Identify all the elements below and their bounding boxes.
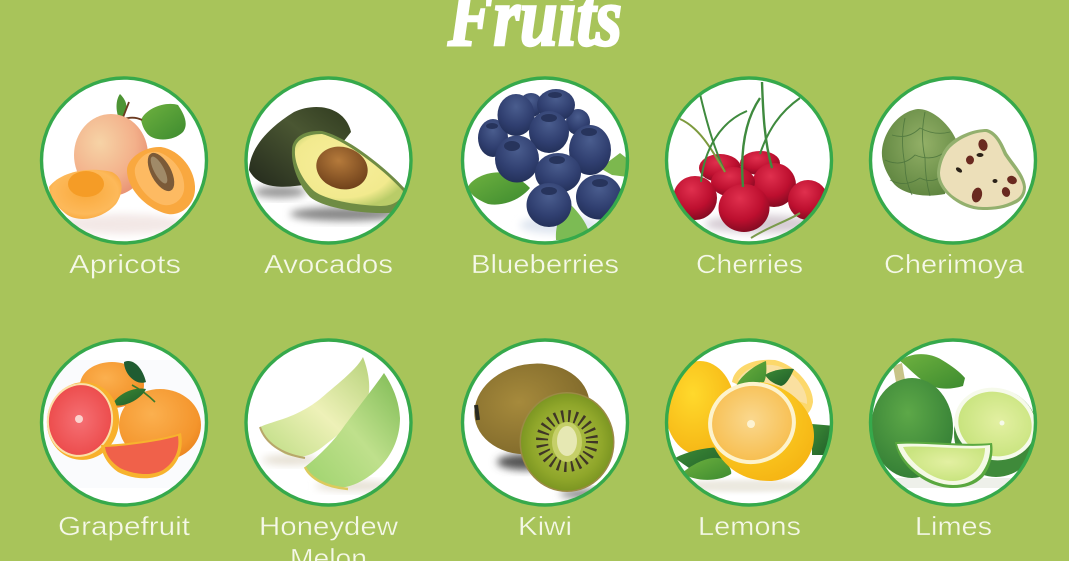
label: Cherimoya: Cherimoya — [884, 249, 1025, 279]
panel: avocados — [246, 78, 411, 279]
ring — [462, 340, 628, 505]
panel: lemons — [665, 340, 835, 541]
ring — [42, 340, 206, 505]
icon: avocados photo — [246, 78, 410, 242]
ring — [666, 78, 832, 243]
label: Apricots: Apricots — [69, 249, 181, 279]
ring — [870, 78, 1036, 243]
ring — [870, 340, 1036, 505]
panel: kiwi — [462, 340, 628, 541]
panel: cherries — [666, 78, 832, 279]
ring — [246, 340, 411, 505]
panel: apricots — [42, 78, 206, 279]
icon: cherries photo — [667, 78, 831, 242]
ring — [462, 78, 628, 243]
icon: honeydew melon photo — [246, 340, 410, 504]
icon: apricots photo — [42, 78, 206, 242]
panel: limes — [870, 340, 1044, 541]
icon: kiwi photo — [463, 340, 627, 504]
label: Lemons: Lemons — [698, 511, 801, 541]
label: Limes: Limes — [915, 511, 992, 541]
icon: grapefruit photo — [41, 340, 206, 504]
label: Grapefruit: Grapefruit — [58, 511, 191, 541]
label: Blueberries: Blueberries — [471, 249, 619, 279]
panel: grapefruit — [41, 340, 206, 541]
label: Avocados: Avocados — [264, 249, 393, 279]
panel: blueberries — [462, 78, 629, 279]
panel: cherimoya — [870, 78, 1036, 279]
icon: cherimoya photo — [871, 78, 1035, 242]
ring — [246, 78, 411, 243]
panel: honeydew melon — [246, 340, 411, 561]
icon: lemons photo — [665, 340, 835, 504]
ring — [42, 78, 206, 243]
label: Honeydew Melon — [259, 511, 398, 561]
icon: limes photo — [871, 340, 1044, 504]
label: Honeydew Melon: Honeydew — [259, 511, 398, 541]
icon: blueberries photo — [463, 78, 629, 242]
ring — [666, 340, 832, 505]
label: Kiwi: Kiwi — [518, 511, 572, 541]
label: Cherries: Cherries — [696, 249, 803, 279]
